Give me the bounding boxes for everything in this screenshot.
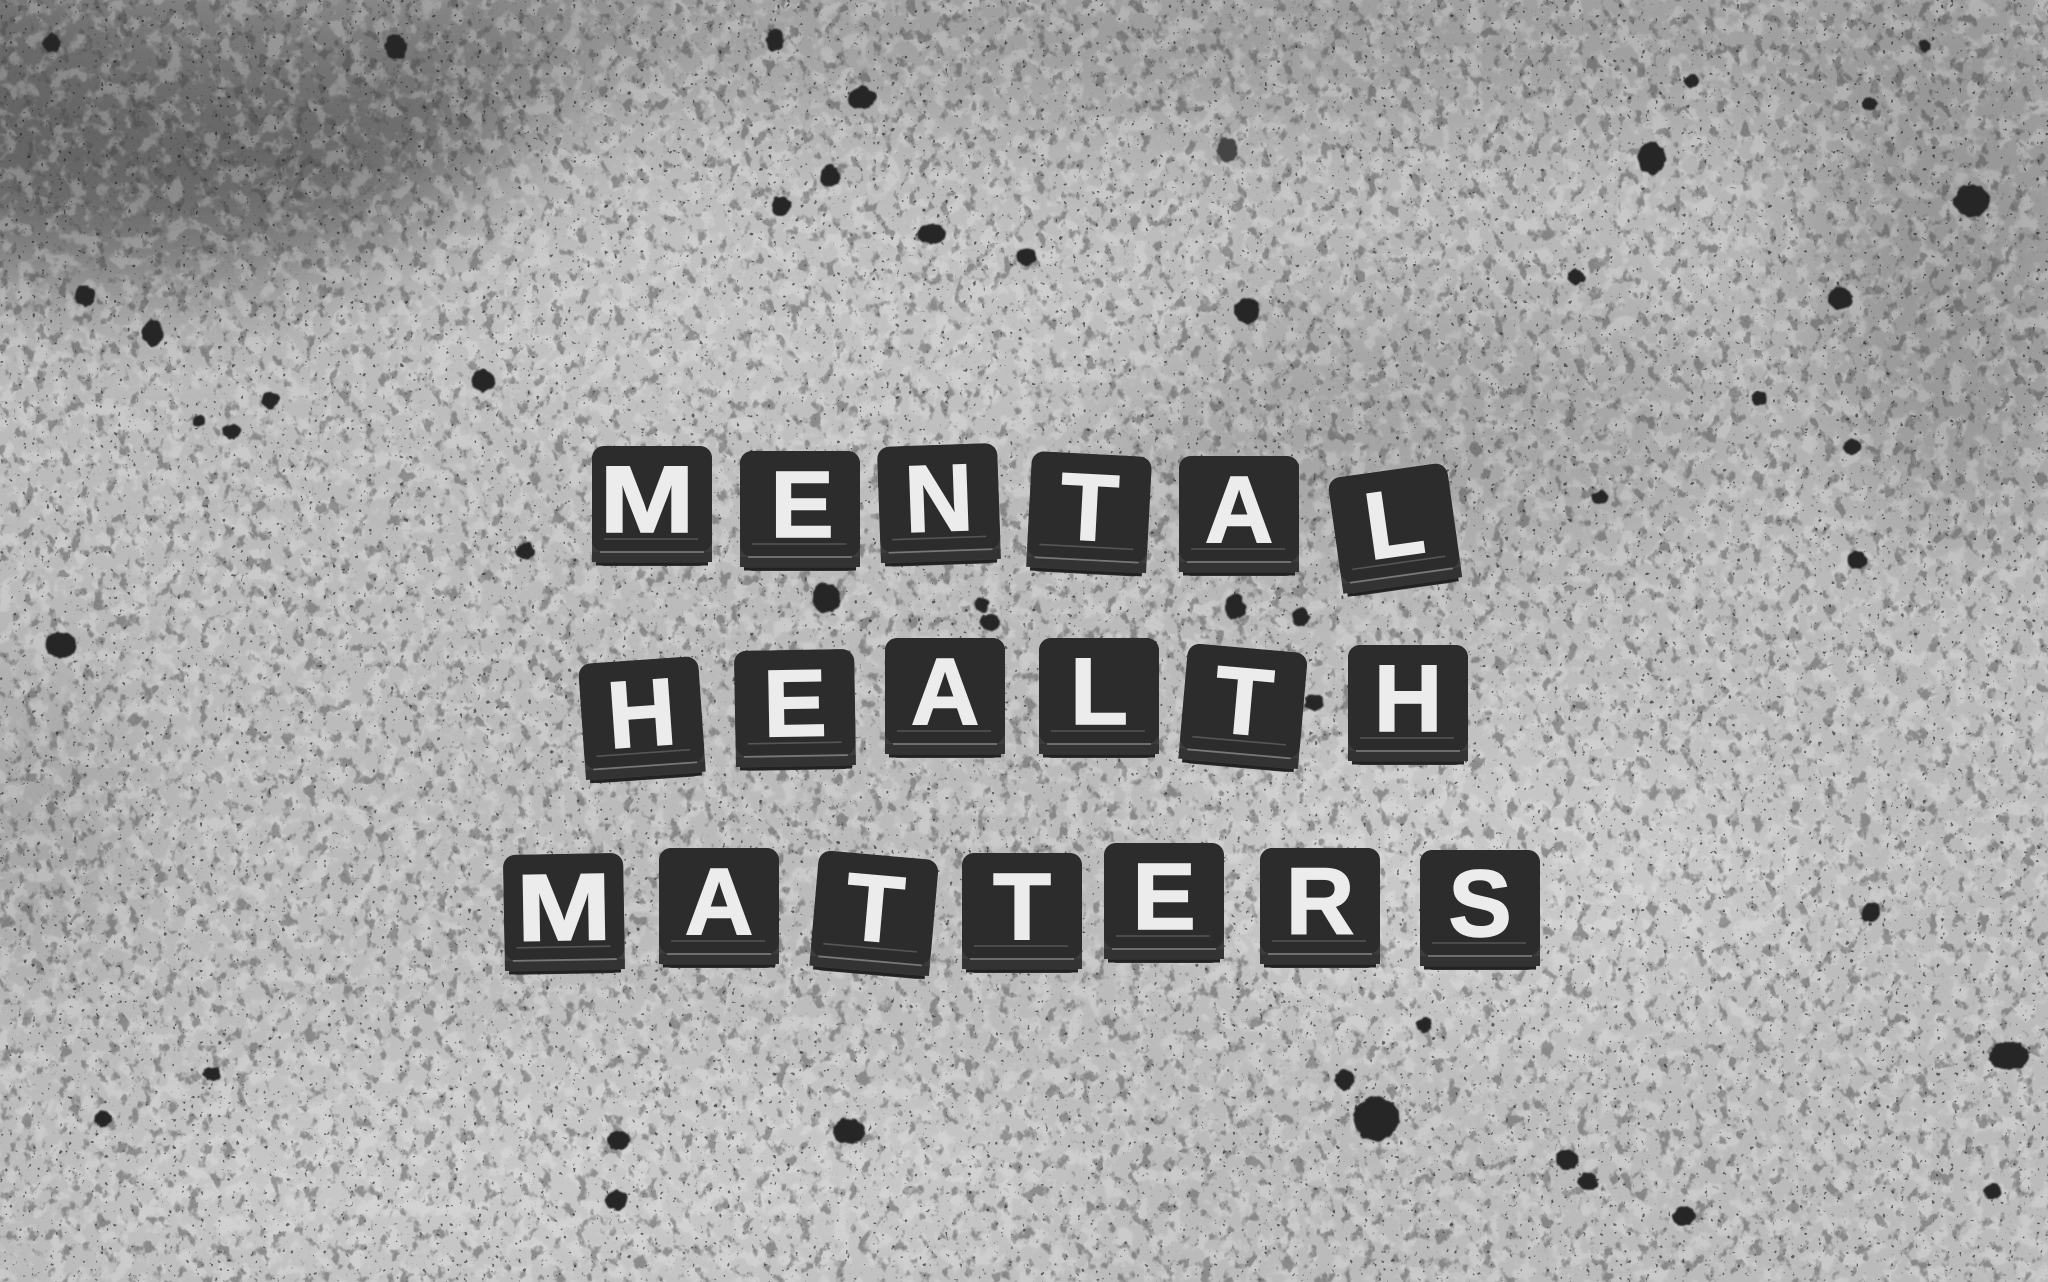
tile: L: L (1358, 468, 1430, 581)
tile: E (734, 649, 856, 771)
tile: H (578, 656, 706, 784)
tile: E: E (1132, 844, 1196, 950)
tile: L (1039, 638, 1159, 758)
tile: E (1104, 843, 1224, 963)
tile: M (592, 446, 712, 566)
tile: M: M (600, 447, 694, 553)
tile: N (877, 443, 1001, 567)
tile: A (885, 638, 1005, 758)
tile: T: T (993, 854, 1051, 960)
tile: T: T (841, 854, 908, 964)
tile: T (1178, 643, 1308, 773)
tile: L (1327, 462, 1463, 598)
tile: T (962, 853, 1082, 973)
tile: R (1260, 848, 1380, 968)
tile: N: N (903, 445, 975, 553)
tile: T (1026, 451, 1152, 577)
tile: A (659, 848, 779, 968)
word: MENTAL (592, 443, 1463, 598)
tile: H: H (1374, 646, 1442, 752)
tile: A: A (685, 849, 753, 955)
tile: L: L (1070, 639, 1128, 745)
tile: A: A (911, 639, 979, 745)
tile: H: H (604, 659, 679, 769)
word: HEALTH (578, 638, 1468, 784)
tile: T: T (1058, 454, 1121, 562)
tile: T (809, 850, 939, 980)
tile: A: A (1205, 457, 1273, 563)
tile: M (503, 853, 625, 975)
tile: S (1420, 850, 1540, 970)
tile: T: T (1210, 647, 1277, 757)
tile: M: M (515, 854, 612, 962)
tile: E (740, 451, 860, 571)
tile: S: S (1448, 851, 1512, 957)
tile: E: E (770, 452, 834, 558)
tile: E: E (762, 650, 828, 758)
word: MATTERS (503, 843, 1540, 980)
tile: A (1179, 456, 1299, 576)
tile: H (1348, 645, 1468, 765)
tile: R: R (1286, 849, 1354, 955)
